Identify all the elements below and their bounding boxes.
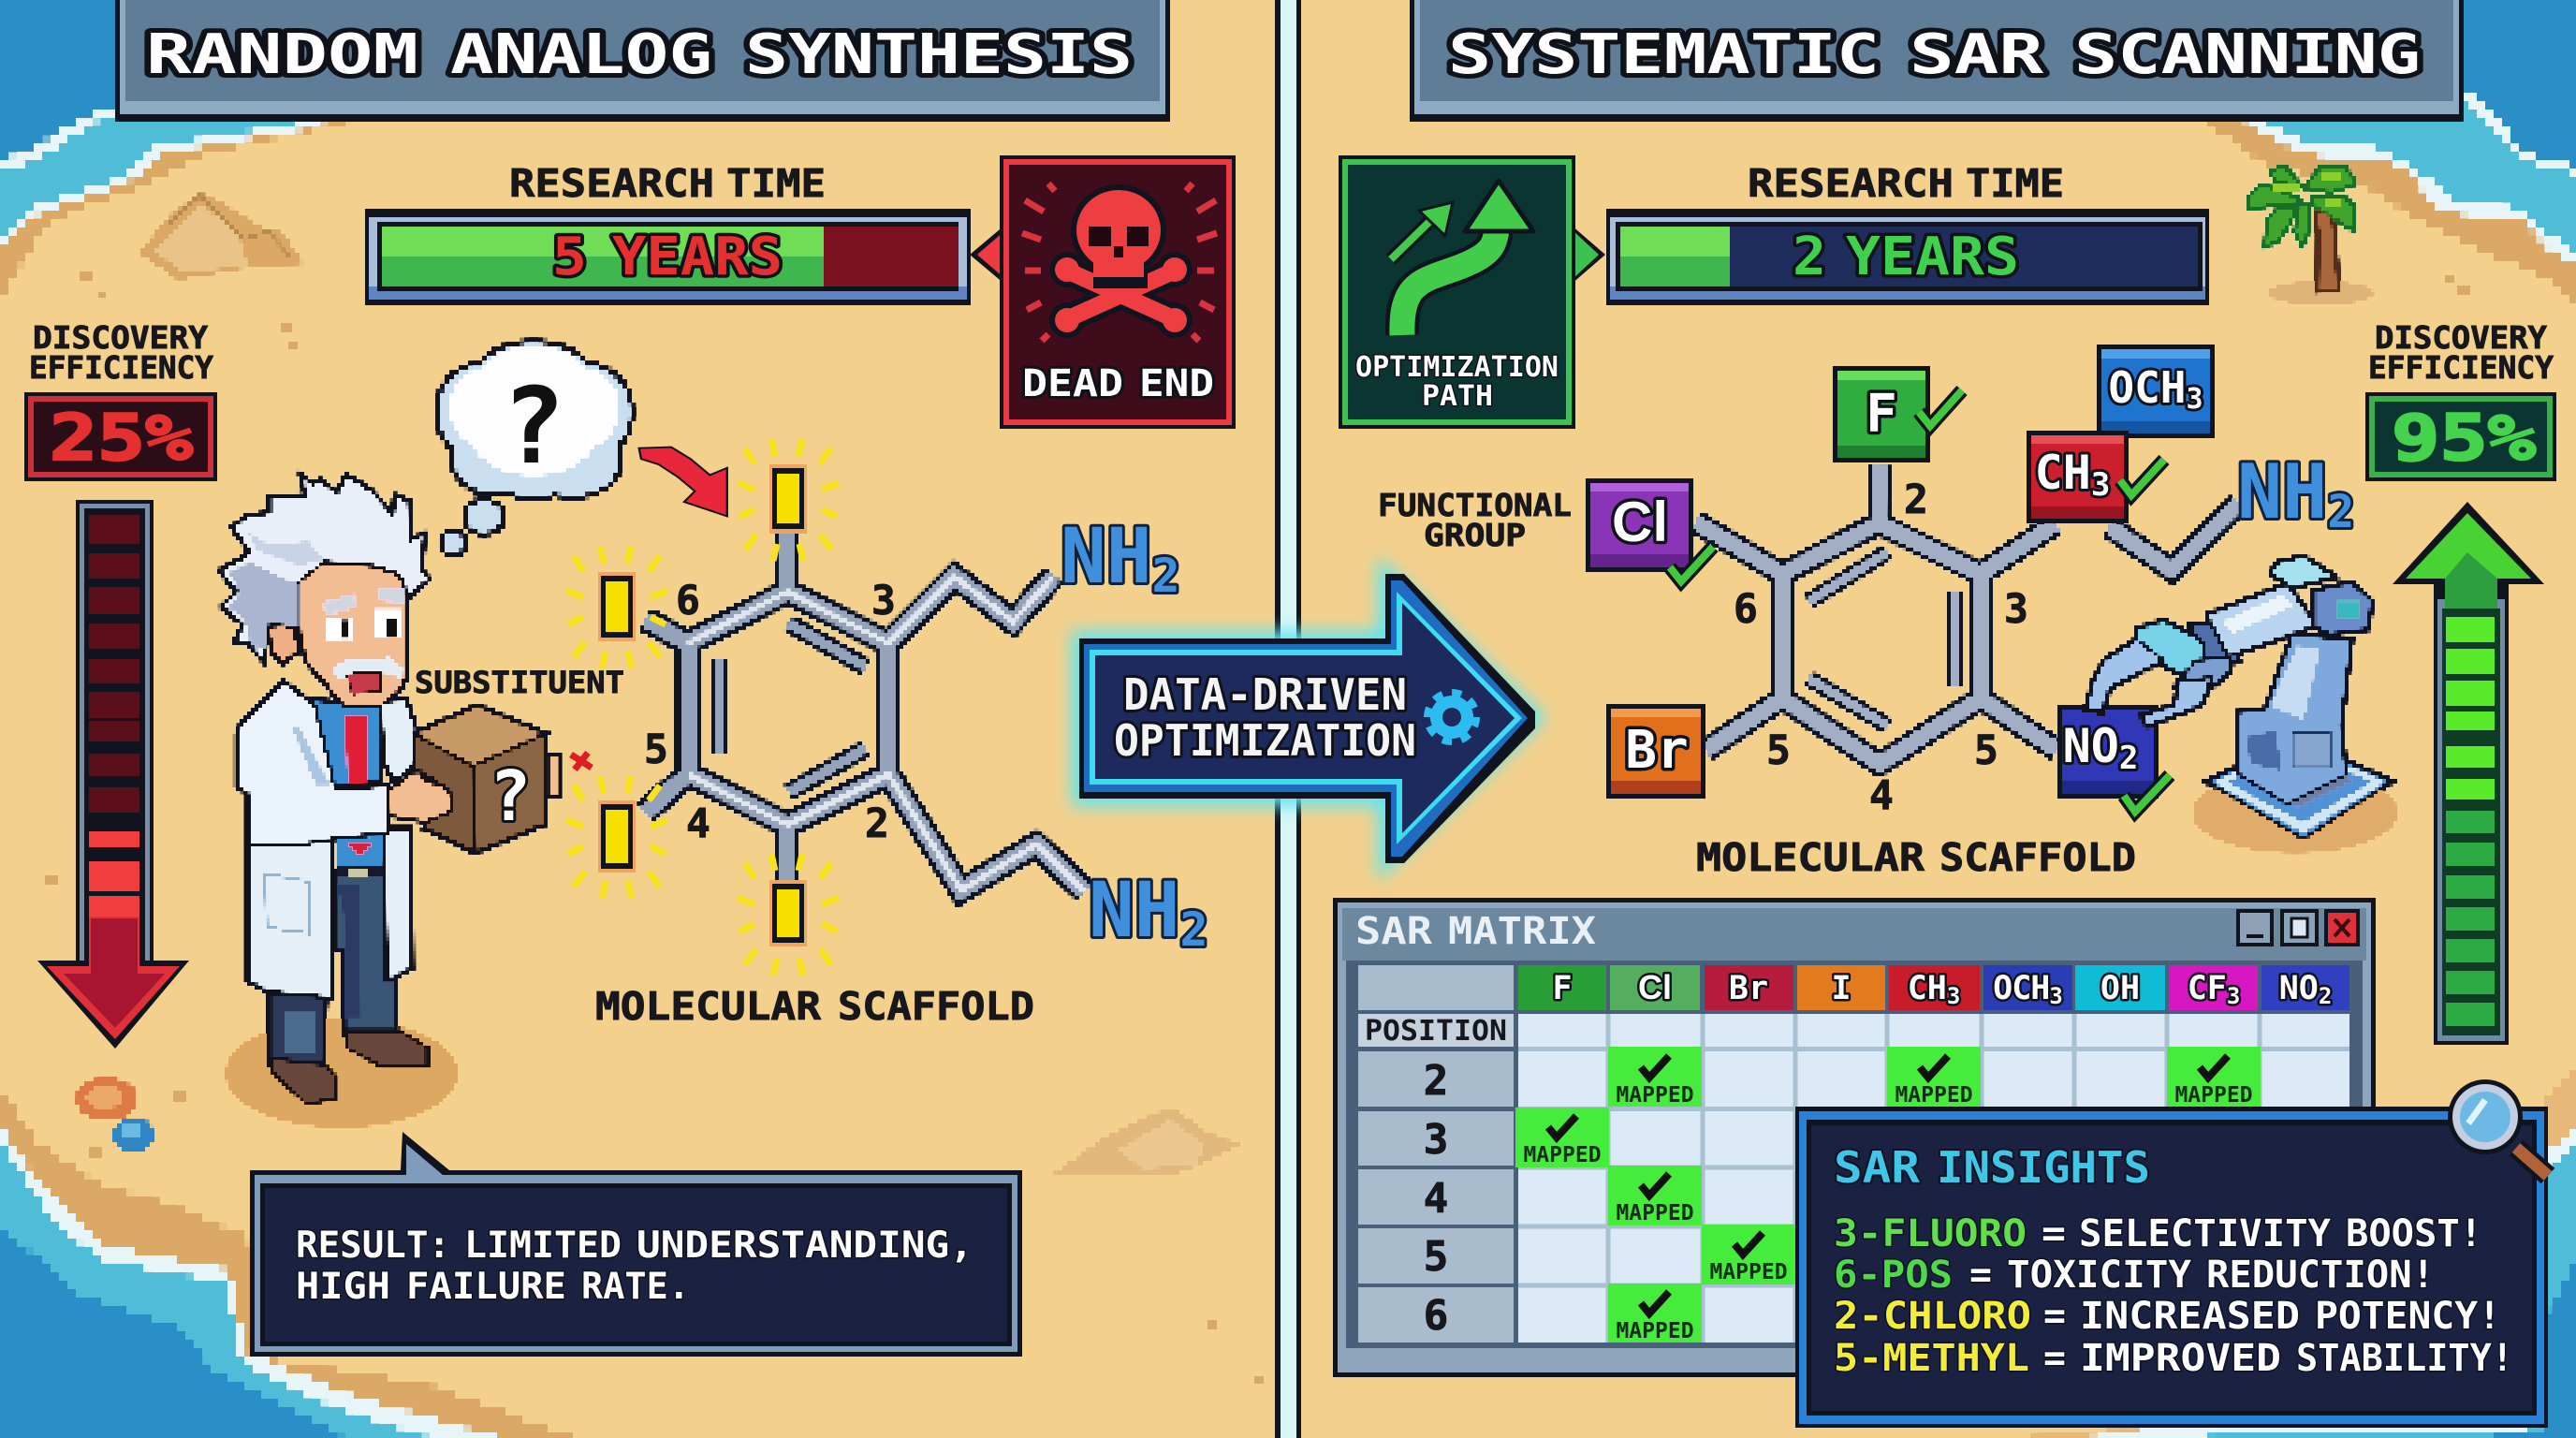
functional group: OCH3: 3 — [2187, 383, 2203, 416]
NH2 group: bottom: 2 — [1180, 902, 1208, 957]
functional group: F — [1833, 366, 1930, 462]
callout text: UNDERSTANDING, — [637, 1225, 973, 1267]
research time label: left — [509, 161, 826, 206]
research time label: right — [1748, 161, 2064, 206]
arrow text: DATA-DRIVEN — [1123, 669, 1407, 720]
insight: 2-chloro: POTENCY! — [2315, 1295, 2501, 1338]
bar label — [1793, 227, 2019, 287]
insight: 3-fluoro — [1834, 1212, 2482, 1255]
position numbers: 5 — [644, 726, 668, 773]
column headers: I — [1831, 970, 1852, 1007]
beach shells — [76, 1078, 154, 1152]
insights heading: INSIGHTS — [1937, 1142, 2150, 1193]
row headers: 5 — [1424, 1233, 1448, 1281]
callout text: RATE. — [581, 1266, 690, 1308]
functional group: Br — [1606, 704, 1705, 799]
bar label: 2 — [1793, 227, 1826, 287]
NH2 group: 2 — [2327, 486, 2354, 538]
discovery efficiency label: left — [29, 319, 213, 386]
research time bar: 5 years — [365, 209, 971, 305]
insight: 6-pos: TOXICITY — [2007, 1254, 2191, 1297]
dead end label — [1022, 362, 1214, 405]
research time bar: 2 years — [1606, 209, 2209, 305]
mapped cell: 2 CF3 — [2167, 1047, 2261, 1108]
functional group: OCH3 — [2097, 345, 2215, 438]
efficiency value: 95% — [2365, 392, 2556, 481]
insight: 3-fluoro: SELECTIVITY — [2079, 1212, 2331, 1255]
red x mark — [571, 753, 592, 770]
insight: 5-methyl — [1834, 1337, 2513, 1380]
NH2 group: NH — [2237, 448, 2327, 536]
row headers: POSITION — [1365, 1015, 1507, 1048]
insight: 6-pos: 6-POS — [1834, 1254, 1953, 1297]
result callout — [250, 1132, 1022, 1357]
sar insights panel — [1795, 1079, 2548, 1428]
beach water: top right — [2207, 0, 2576, 302]
dead end label: DEAD — [1022, 362, 1123, 405]
bar label: YEARS — [1846, 227, 2019, 287]
row headers: 2 — [1424, 1057, 1448, 1105]
insight: 5-methyl: 5-METHYL — [1834, 1337, 2029, 1380]
title text: SYNTHESIS — [745, 22, 1133, 86]
title banner: systematic sar scanning — [1410, 0, 2464, 122]
column headers: CH — [1908, 970, 1947, 1007]
sar matrix window — [1333, 898, 2376, 1377]
molecular scaffold label: left — [595, 984, 1034, 1029]
insight: 2-chloro — [1834, 1295, 2501, 1338]
mapped cell: 2 CH3 — [1887, 1047, 1981, 1108]
title text: SYSTEMATIC — [1448, 22, 1880, 86]
bonds — [646, 533, 1084, 890]
arrow text: OPTIMIZATION — [1114, 715, 1416, 766]
substituent slot: bottom — [738, 854, 839, 976]
efficiency value: 25%: 25% — [50, 402, 193, 476]
box question mark: ? — [490, 756, 531, 837]
column headers: F — [1552, 970, 1573, 1007]
thought bubble with question mark — [433, 339, 635, 558]
molecular scaffold label: right — [1696, 835, 2136, 880]
position numbers: 2 — [865, 800, 889, 847]
functional group: CH3 — [2027, 431, 2129, 523]
position numbers: 2 — [1904, 477, 1928, 523]
lab coat lower — [248, 794, 332, 998]
shoes — [273, 1058, 337, 1104]
functional group label — [1378, 487, 1572, 553]
window buttons — [2236, 909, 2360, 946]
position numbers: 6 — [1734, 586, 1758, 633]
mapped cell: 5 Br: MAPPED — [1709, 1260, 1788, 1284]
data-driven optimization arrow — [1079, 574, 1535, 863]
red arrow to substituent — [639, 448, 727, 516]
efficiency value: 95%: 95% — [2392, 402, 2536, 476]
optimization path panel — [1339, 155, 1605, 429]
column headers: NO — [2279, 970, 2319, 1007]
title banner: random analog synthesis — [115, 0, 1170, 122]
title text: RANDOM — [146, 22, 418, 86]
functional group: CH3: 3 — [2091, 466, 2110, 504]
functional group: CH3: CH — [2035, 446, 2091, 500]
research time label: right: TIME — [1966, 161, 2064, 206]
substituent slot: upper left — [566, 547, 667, 668]
position numbers — [644, 578, 896, 847]
insight: 5-methyl: IMPROVED — [2080, 1337, 2281, 1380]
matrix cells — [1518, 1014, 2349, 1343]
callout text: RESULT: — [296, 1225, 450, 1267]
insight: 2-chloro: INCREASED — [2080, 1295, 2300, 1338]
sand specks — [45, 271, 2470, 1384]
column headers — [1358, 965, 2349, 1010]
research time label: left: TIME — [726, 161, 826, 206]
row headers: 3 — [1424, 1116, 1448, 1164]
rising efficiency meter — [2393, 502, 2544, 1045]
column headers: CF — [2188, 970, 2227, 1007]
beach water: bottom right — [2022, 1067, 2576, 1438]
palm tree — [2250, 167, 2373, 304]
insight: 2-chloro: 2-CHLORO — [1834, 1295, 2031, 1338]
brows and eyes — [323, 594, 355, 616]
mapped cell: 5 Br — [1702, 1225, 1795, 1284]
beach water: top left — [0, 0, 374, 298]
title text: SAR — [1910, 22, 2044, 86]
column headers: Br — [1729, 970, 1768, 1007]
row headers — [1358, 1014, 1514, 1343]
discovery efficiency label: right — [2368, 319, 2554, 386]
mapped cell: 3 F — [1515, 1108, 1609, 1167]
question mark: ? — [502, 366, 565, 488]
mapped cell: 4 Cl — [1608, 1166, 1702, 1225]
substituent slot: top — [738, 439, 839, 561]
functional group: F: F — [1866, 384, 1897, 445]
moustache and mouth — [346, 671, 381, 695]
mapped cell: 2 CF3: MAPPED — [2174, 1083, 2253, 1108]
callout text: LIMITED — [464, 1225, 622, 1267]
dead end panel — [970, 155, 1236, 429]
window title — [1355, 910, 1596, 953]
column headers: OH — [2100, 970, 2140, 1007]
lab coat upper and arm — [237, 682, 388, 845]
box — [414, 734, 475, 852]
title text: SCANNING — [2074, 22, 2421, 86]
position numbers: 6 — [676, 578, 700, 624]
mapped cell: 2 Cl: MAPPED — [1616, 1083, 1694, 1108]
optimization path label: OPTIMIZATION — [1355, 351, 1559, 384]
bar label — [552, 227, 783, 287]
molecular scaffold label: left: SCAFFOLD — [838, 984, 1034, 1029]
title text — [1448, 22, 2421, 86]
mapped cell: 4 Cl: MAPPED — [1616, 1201, 1694, 1225]
legs — [270, 994, 326, 1064]
insight: 6-pos: REDUCTION! — [2206, 1254, 2435, 1297]
arrow text — [1114, 669, 1416, 766]
insight: 6-pos: = — [1969, 1254, 1992, 1297]
position numbers: 5 — [1974, 727, 1998, 774]
window title: MATRIX — [1448, 910, 1596, 953]
center divider — [1275, 0, 1301, 1438]
molecular scaffold label: left: MOLECULAR — [595, 984, 821, 1029]
sand pile: top left — [139, 195, 304, 280]
icon: rising arrows — [1391, 181, 1533, 335]
sand pile: bottom right — [1055, 1107, 1240, 1173]
scientist character — [220, 476, 559, 1127]
position numbers: 4 — [1869, 772, 1894, 819]
substituent slot: lower left — [566, 776, 667, 898]
NH2 group: top: 2 — [1152, 549, 1180, 603]
sand shadow — [227, 1020, 457, 1127]
insight: 2-chloro: = — [2043, 1295, 2066, 1338]
functional group: Cl — [1586, 478, 1693, 572]
window title: SAR — [1355, 910, 1433, 953]
column headers: Cl — [1638, 968, 1672, 1006]
callout text: HIGH — [296, 1266, 390, 1308]
research time label: left: RESEARCH — [509, 161, 714, 206]
mapped cell: 3 F: MAPPED — [1523, 1143, 1602, 1167]
bar label: 5 — [552, 227, 587, 287]
bonds — [1696, 466, 2239, 764]
optimization path label — [1355, 351, 1559, 413]
dead end label: END — [1139, 362, 1214, 405]
column headers: 3 — [2227, 983, 2240, 1009]
discovery efficiency label: left: EFFICIENCY — [29, 349, 213, 386]
position numbers — [1734, 477, 2028, 819]
insight: 5-methyl: = — [2043, 1337, 2066, 1380]
molecular scaffold: left — [566, 439, 1208, 976]
head — [269, 624, 300, 663]
optimization path label: PATH — [1422, 380, 1493, 413]
callout text: FAILURE — [406, 1266, 566, 1308]
functional group label: GROUP — [1424, 517, 1526, 553]
row headers: 6 — [1424, 1292, 1448, 1340]
insight: 5-methyl: STABILITY! — [2296, 1337, 2513, 1380]
mapped cell: 6 Cl: MAPPED — [1616, 1319, 1694, 1343]
substituent label: SUBSTITUENT — [415, 665, 624, 700]
molecular scaffold label: right: MOLECULAR — [1696, 835, 1925, 880]
falling efficiency meter — [37, 500, 189, 1049]
molecular scaffold: right — [1586, 345, 2354, 819]
title text — [146, 22, 1133, 86]
row headers: 4 — [1424, 1175, 1448, 1223]
beach water: bottom left — [0, 1086, 575, 1438]
NH2 group: top: NH — [1061, 513, 1152, 601]
position numbers: 3 — [871, 578, 896, 624]
functional group: Cl: Cl — [1612, 491, 1668, 553]
insight: 3-fluoro: 3-FLUORO — [1834, 1212, 2027, 1255]
position numbers: 5 — [1766, 727, 1791, 774]
check marks — [1670, 390, 2170, 812]
column headers: 2 — [2319, 983, 2332, 1009]
position numbers: 4 — [686, 800, 710, 847]
insights heading — [1834, 1142, 2150, 1193]
research time label: right: RESEARCH — [1748, 161, 1954, 206]
insight: 3-fluoro: = — [2042, 1212, 2066, 1255]
insight: 6-pos — [1834, 1254, 2435, 1297]
hair — [220, 476, 429, 661]
column headers: 3 — [2049, 983, 2062, 1009]
icon: gear — [1427, 693, 1476, 741]
mapped cell: 2 Cl — [1608, 1047, 1702, 1108]
rays — [1022, 183, 1217, 341]
insights heading: SAR — [1834, 1142, 1920, 1193]
mapped cell: 2 CH3: MAPPED — [1895, 1083, 1973, 1108]
functional group: NO2: NO — [2063, 719, 2119, 773]
column headers: 3 — [1947, 983, 1960, 1009]
functional group: OCH3: OCH — [2108, 362, 2187, 413]
insight: 3-fluoro: BOOST! — [2346, 1212, 2482, 1255]
icon: magnifying glass — [2448, 1079, 2548, 1176]
callout text — [296, 1225, 973, 1308]
discovery efficiency label: right: EFFICIENCY — [2368, 349, 2554, 386]
discovery efficiency label: left: DISCOVERY — [33, 319, 208, 356]
functional group: NO2: 2 — [2119, 740, 2138, 777]
column headers: OCH — [1993, 970, 2049, 1007]
NH2 group: bottom: NH — [1089, 867, 1180, 955]
functional group: NO2 — [2057, 705, 2159, 799]
functional group label: FUNCTIONAL — [1378, 487, 1572, 523]
title text: ANALOG — [450, 22, 712, 86]
functional group: Br: Br — [1625, 720, 1689, 781]
bar label: YEARS — [612, 227, 783, 287]
efficiency value: 25% — [24, 392, 217, 481]
position numbers: 3 — [2004, 586, 2028, 633]
icon: skull and crossbones — [1049, 187, 1193, 338]
molecular scaffold label: right: SCAFFOLD — [1939, 835, 2136, 880]
discovery efficiency label: right: DISCOVERY — [2375, 319, 2547, 356]
shirt and tie — [312, 699, 384, 787]
robot arm — [2086, 556, 2397, 853]
mapped cell: 6 Cl — [1608, 1284, 1702, 1343]
hand — [388, 769, 453, 824]
